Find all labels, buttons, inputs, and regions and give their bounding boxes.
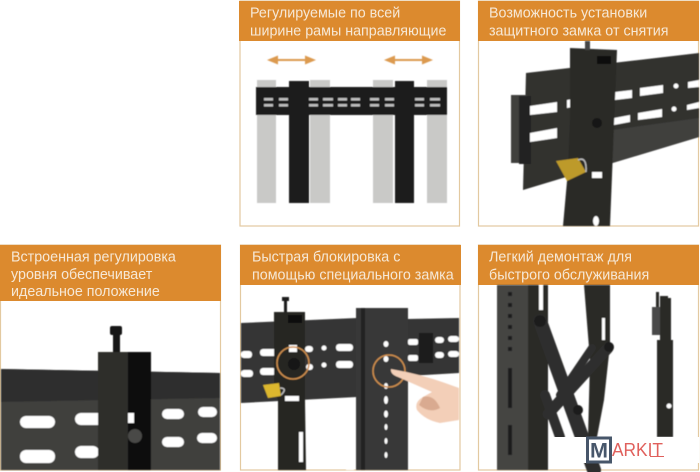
column holes — [508, 292, 512, 455]
heading: padlock option — [478, 1, 699, 41]
heading: built-in level adjustment: уровня обеспечивает — [11, 267, 153, 283]
black rails — [289, 81, 414, 203]
photo: scissor arm mechanism — [497, 285, 673, 470]
plate slots — [20, 407, 217, 463]
heading: quick lock: Быстрая блокировка с — [252, 250, 400, 266]
heading: adjustable rails: ширине рамы направляющие — [250, 24, 447, 40]
panel: padlock option — [478, 1, 699, 226]
plate — [241, 318, 357, 403]
watermark: MARKIT: ARKIT — [612, 440, 663, 460]
photo: lock with pointing hand — [241, 297, 459, 470]
bracket — [98, 352, 128, 470]
panel: easy removal — [478, 245, 699, 470]
heading: quick lock — [240, 245, 461, 285]
panel: built-in level adjustment — [0, 245, 221, 470]
watermark: MARKIT: M — [590, 440, 608, 462]
plate slots — [241, 336, 459, 377]
heading: adjustable rails — [239, 1, 460, 41]
central column — [356, 308, 408, 470]
heading: built-in level adjustment — [0, 245, 221, 301]
plate — [1, 369, 220, 470]
column holes — [384, 341, 388, 458]
heading: adjustable rails: Регулируемые по всей — [250, 6, 400, 22]
heading: quick lock: помощью специального замка — [252, 268, 454, 284]
left column — [497, 285, 528, 470]
diagram: mount with sliding rails — [256, 56, 447, 203]
bolt — [282, 297, 289, 312]
heading: built-in level adjustment: Встроенная регулировка — [11, 250, 176, 266]
ghost rails — [257, 80, 447, 203]
highlight circles — [277, 347, 405, 387]
plate slots — [530, 80, 699, 142]
photo: bracket close-up — [1, 326, 220, 470]
left bracket — [274, 312, 306, 470]
photo: bracket with padlock — [511, 41, 699, 226]
panel: quick lock — [240, 245, 461, 470]
arrow: left rail movement — [267, 56, 316, 64]
bolt — [110, 326, 122, 352]
horizontal bar — [256, 87, 447, 115]
padlock — [556, 158, 586, 181]
panel: adjustable rails — [239, 1, 460, 226]
side view bracket — [652, 292, 673, 437]
hand — [391, 369, 459, 423]
vertical bracket — [563, 48, 617, 226]
heading: easy removal: Легкий демонтаж для — [489, 250, 632, 266]
rear plate — [523, 53, 699, 190]
heading: padlock option: Возможность установки — [489, 6, 647, 22]
heading: padlock option: защитного замка от снятия — [489, 24, 669, 40]
heading: easy removal — [478, 245, 699, 285]
heading: built-in level adjustment: идеальное положение — [11, 284, 160, 300]
arrow: right rail movement — [384, 56, 433, 64]
padlock — [263, 383, 284, 398]
watermark: MARKIT — [550, 437, 699, 463]
heading: easy removal: быстрого обслуживания — [489, 268, 649, 284]
scissor arms — [540, 321, 608, 470]
bar slots — [264, 98, 440, 106]
end bracket — [511, 95, 527, 163]
right column — [584, 285, 610, 437]
